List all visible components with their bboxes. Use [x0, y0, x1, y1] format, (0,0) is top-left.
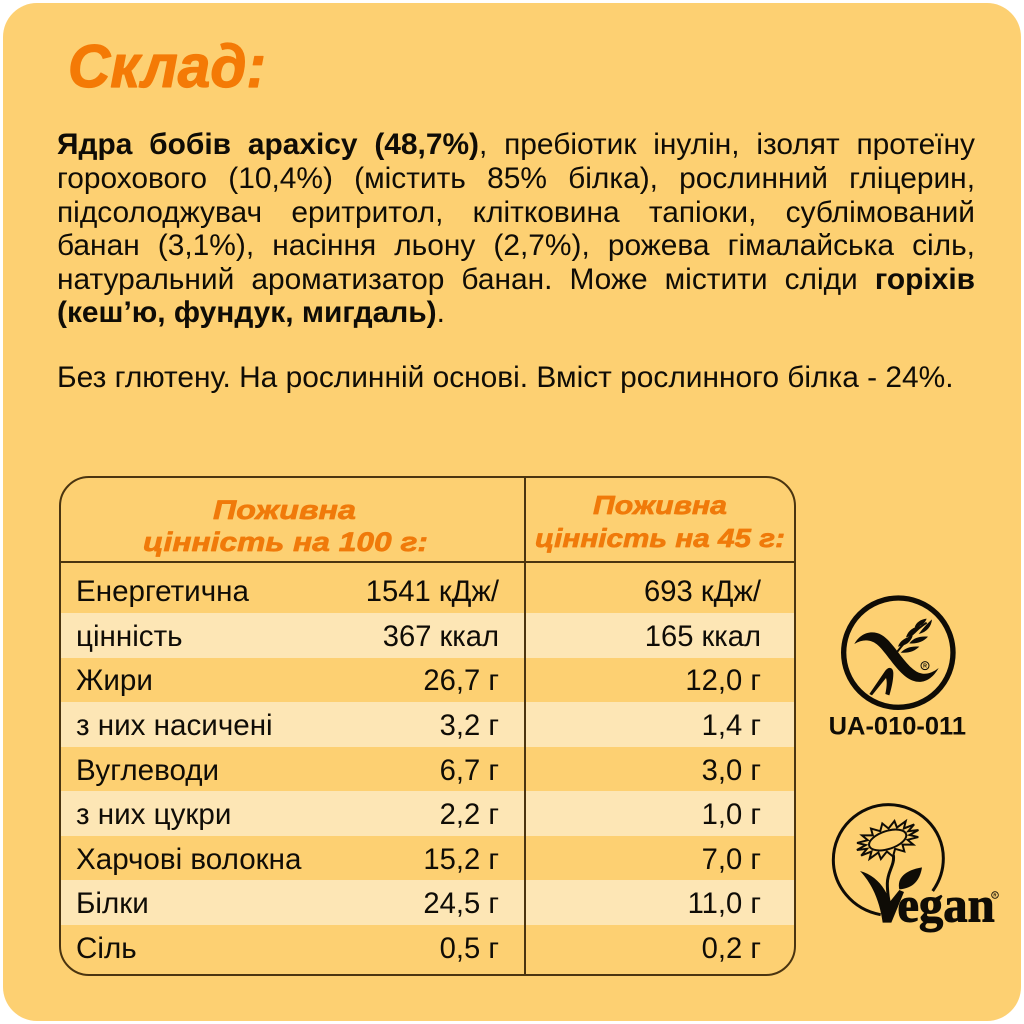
row: sugars: 2,2 г	[440, 799, 499, 831]
table header: per 100 g: Поживна	[213, 495, 356, 525]
row: energy kcal: 165 ккал	[645, 620, 761, 652]
row: carbohydrates: 3,0 г	[702, 754, 761, 786]
title: Склад:	[68, 33, 266, 100]
nutrition table	[59, 476, 796, 976]
icon: gluten free badge	[829, 595, 966, 741]
row: saturated: з них насичені	[76, 708, 273, 742]
table header: per 100 g: цінність на 100 г:	[143, 527, 428, 557]
row: fibre	[76, 842, 761, 876]
row: protein: Білки	[76, 887, 149, 920]
row: energy kcal	[76, 620, 761, 652]
row: saturated	[76, 708, 761, 742]
row: salt: 0,2 г	[702, 932, 761, 964]
row: fibre: 7,0 г	[702, 844, 761, 876]
row: protein	[76, 887, 761, 920]
row: fibre: Харчові волокна	[76, 842, 301, 876]
table header: per 45 g: цінність на 45 г:	[535, 523, 785, 553]
row: protein: 11,0 г	[688, 888, 761, 920]
table header: per 100 g	[143, 495, 428, 557]
row: carbohydrates	[76, 754, 761, 786]
row: sugars: 1,0 г	[702, 799, 761, 831]
row: fats: 12,0 г	[685, 665, 761, 697]
icon: gluten free badge: UA-010-011	[829, 713, 966, 741]
row: energy kJ	[76, 575, 761, 608]
table header: per 45 g: Поживна	[593, 490, 727, 520]
row: carbohydrates: Вуглеводи	[76, 754, 219, 786]
row: energy kJ: Енергетична	[76, 575, 249, 608]
row: saturated: 3,2 г	[440, 710, 499, 742]
row: protein: 24,5 г	[423, 888, 499, 920]
icon: vegan badge: egan	[897, 877, 995, 933]
table header: per 45 g	[535, 490, 785, 553]
row: fats	[76, 664, 761, 697]
row: fats: 26,7 г	[423, 665, 499, 697]
row: fats: Жири	[76, 664, 153, 697]
row: energy kcal: цінність	[76, 620, 183, 652]
row: salt: 0,5 г	[440, 932, 499, 964]
row: saturated: 1,4 г	[702, 710, 761, 742]
row: energy kJ: 1541 кДж/	[366, 576, 499, 608]
ingredients text block: (кеш’ю, фундук, мигдаль).	[57, 296, 445, 329]
row: energy kcal: 367 ккал	[383, 620, 499, 652]
row: sugars: з них цукри	[76, 798, 231, 831]
row: carbohydrates: 6,7 г	[440, 754, 499, 786]
ingredients text block: натуральний ароматизатор банан. Може містити сліди горіхів	[57, 263, 975, 296]
row: sugars	[76, 798, 761, 831]
row: salt	[76, 932, 761, 964]
icon: vegan badge	[832, 803, 999, 933]
ingredients text block: Ядра бобів арахісу (48,7%), пребіотик інулін, ізолят протеїну	[57, 128, 975, 161]
ingredients text block: банан (3,1%), насіння льону (2,7%), рожева гімалайська сіль,	[57, 229, 975, 262]
ingredients text block: підсолоджувач еритритол, клітковина тапіоки, сублімований	[57, 196, 975, 229]
icon: vegan badge: R	[993, 893, 997, 898]
row: fibre: 15,2 г	[423, 844, 499, 876]
row: energy kJ: 693 кДж/	[644, 576, 761, 608]
row: salt: Сіль	[76, 932, 137, 964]
ingredients text block	[57, 128, 975, 394]
ingredients text block: Без глютену. На рослинній основі. Вміст рослинного білка - 24%.	[57, 361, 954, 394]
ingredients text block: горохового (10,4%) (містить 85% білка), рослинний гліцерин,	[57, 162, 975, 195]
icon: gluten free badge: R	[923, 664, 927, 670]
